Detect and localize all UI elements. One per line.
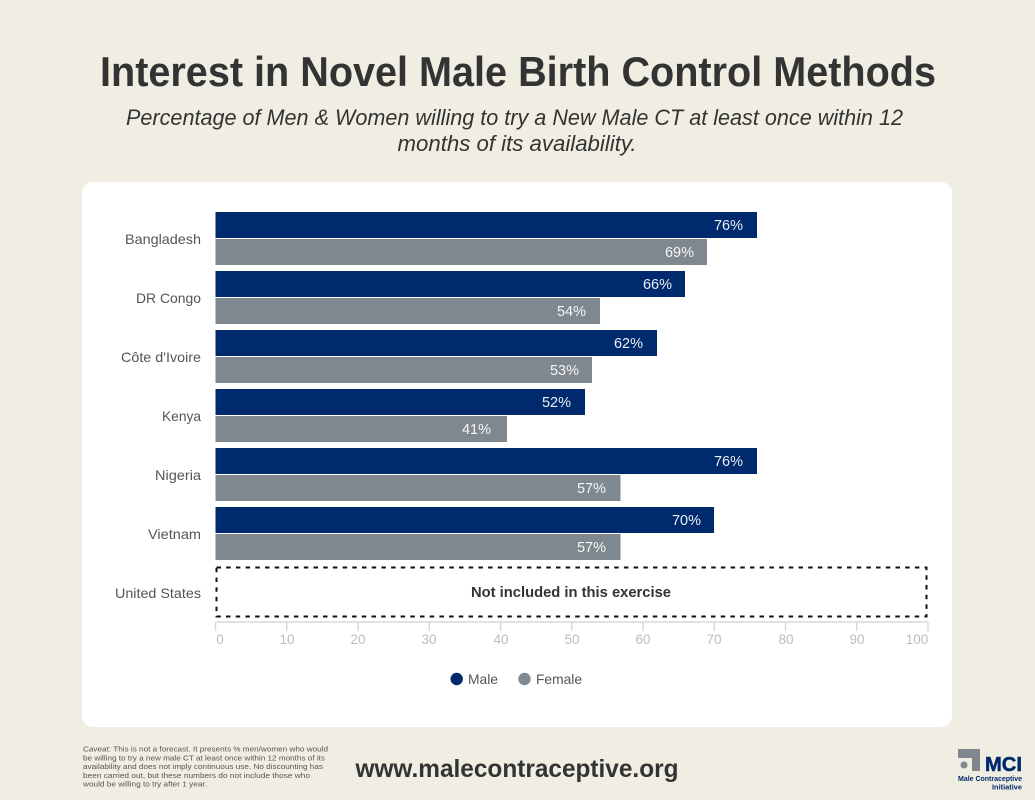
x axis: 50 <box>564 632 580 647</box>
callout: not included: Not included in this exercise <box>471 585 671 601</box>
logo: MCI: MCI <box>985 754 1022 776</box>
logo: MCI: Male Contraceptive <box>958 776 1022 783</box>
value labels: 76% <box>714 218 743 234</box>
x axis: 90 <box>849 632 865 647</box>
legend: Male <box>468 671 498 687</box>
x axis: 10 <box>279 632 295 647</box>
x axis: 40 <box>493 632 509 647</box>
value labels: 62% <box>614 336 643 352</box>
country labels: DR Congo <box>136 290 201 306</box>
value labels: 41% <box>462 422 491 438</box>
value labels: 66% <box>643 277 672 293</box>
legend: Female <box>536 671 582 687</box>
country labels: Bangladesh <box>125 231 201 247</box>
value labels: 57% <box>577 481 606 497</box>
country labels: United States <box>115 585 201 601</box>
value labels: 53% <box>550 363 579 379</box>
x axis <box>216 622 928 647</box>
x axis: 0 <box>216 632 224 647</box>
subtitle <box>126 105 903 156</box>
title: Interest in Novel Male Birth Control Methods <box>100 48 936 95</box>
male bars <box>216 212 757 533</box>
value labels: 54% <box>557 304 586 320</box>
female bars <box>216 239 707 560</box>
x axis: 70 <box>706 632 722 647</box>
country labels: Nigeria <box>155 467 201 483</box>
x axis: 80 <box>778 632 794 647</box>
country labels: Vietnam <box>148 526 201 542</box>
value labels: 52% <box>542 395 571 411</box>
caveat text: Caveat: This is not a forecast. It presents % men/women who would <box>83 744 328 754</box>
value labels: 69% <box>665 245 694 261</box>
subtitle: months of its availability. <box>398 131 636 156</box>
callout: not included <box>216 568 926 616</box>
x axis: 60 <box>635 632 651 647</box>
logo: MCI <box>958 749 1022 792</box>
value labels: 76% <box>714 454 743 470</box>
legend <box>450 671 582 687</box>
country labels: Kenya <box>162 408 201 424</box>
caveat text <box>82 744 328 788</box>
caveat text: be willing to try a new male CT at least once within 12 months of its <box>83 754 325 762</box>
value labels <box>462 218 743 556</box>
chart: willingness by country <box>115 212 928 687</box>
panel: chart card <box>82 182 952 727</box>
website url: www.malecontraceptive.org <box>355 755 678 783</box>
x axis: 20 <box>350 632 366 647</box>
caveat text: availability and does not imply continuous use. No discounting has <box>83 762 323 771</box>
country labels <box>115 231 201 601</box>
subtitle: Percentage of Men & Women willing to try a New Male CT at least once within 12 <box>126 105 903 130</box>
x axis: 100 <box>906 632 928 647</box>
caveat text: been carried out, but these numbers do not include those who <box>83 771 310 780</box>
caveat text: would be willing to try after 1 year. <box>82 780 207 788</box>
value labels: 70% <box>672 513 701 529</box>
country labels: Côte d'Ivoire <box>121 349 201 365</box>
value labels: 57% <box>577 540 606 556</box>
x axis: 30 <box>421 632 437 647</box>
logo: MCI: Initiative <box>992 784 1022 792</box>
